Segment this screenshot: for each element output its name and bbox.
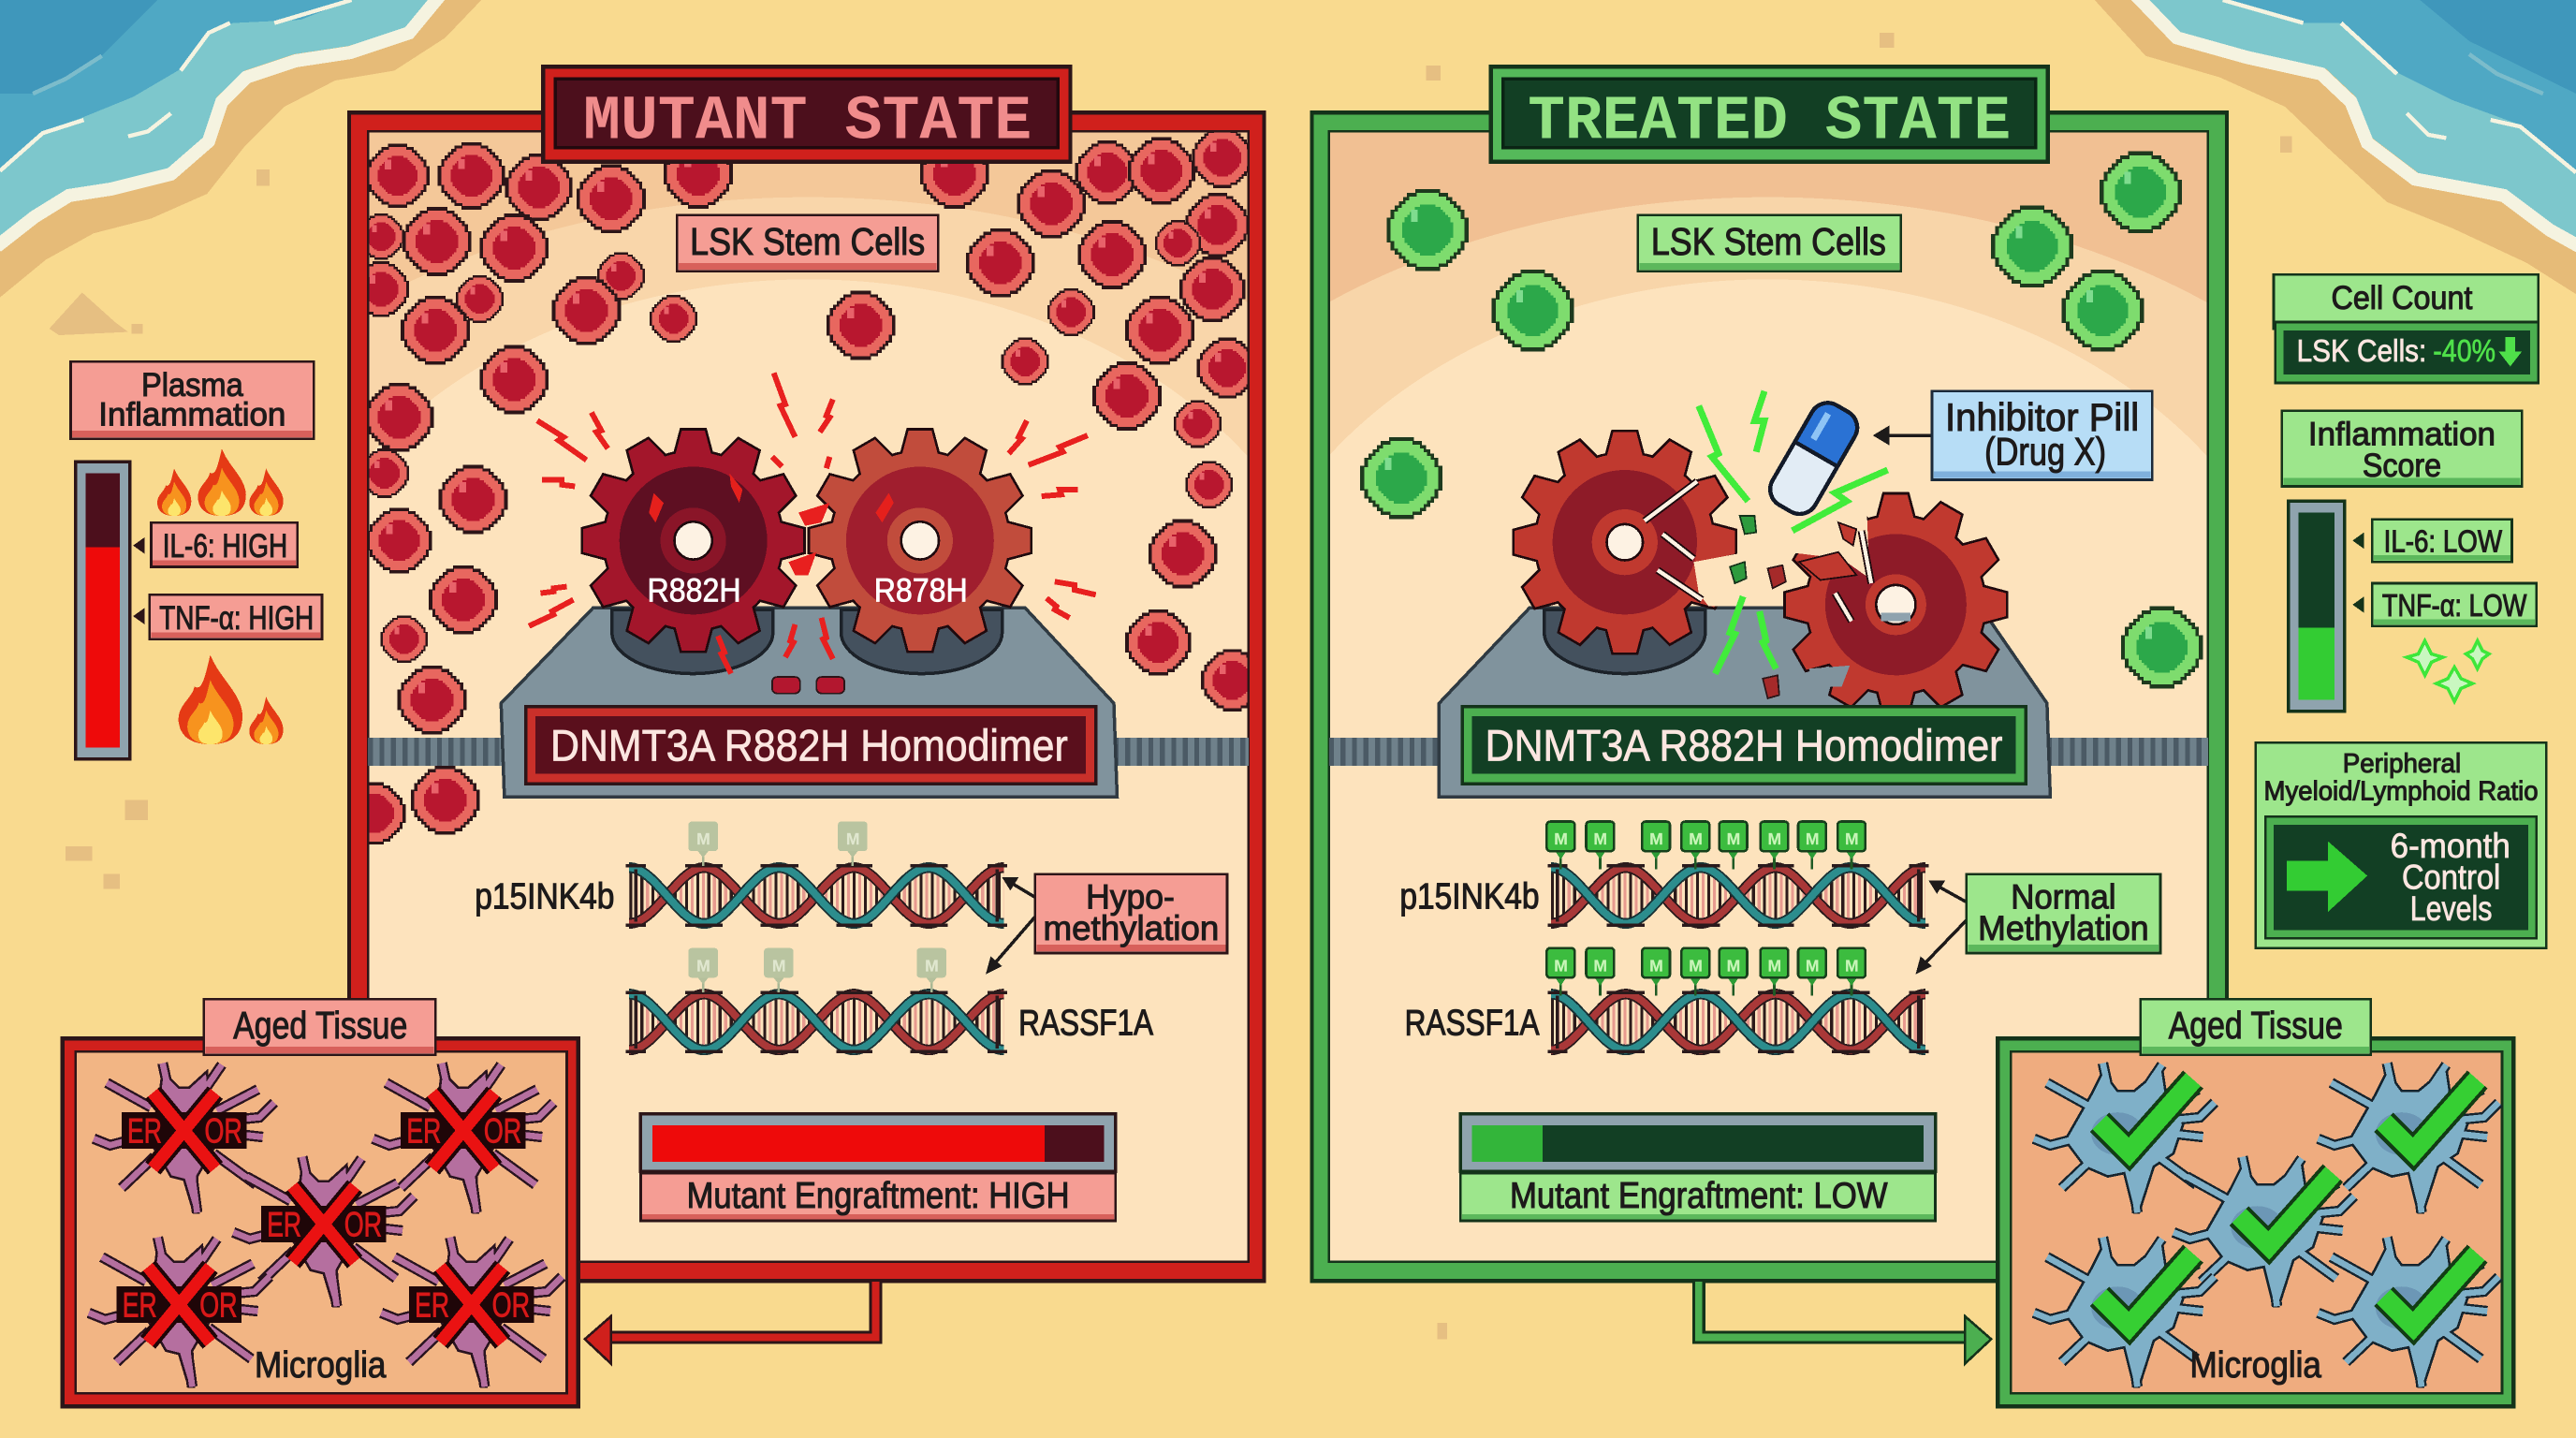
fragments and green sparks (1699, 391, 1888, 698)
dark result box: Control (2402, 858, 2500, 897)
DNA strand RASSF1A, methylated: M (1649, 956, 1663, 975)
panel: aged tissue treated (1998, 999, 2513, 1406)
DNA strand RASSF1A, hypomethylated: M (696, 956, 710, 975)
panel frame (349, 112, 1265, 1281)
icon: sparkles (2407, 640, 2489, 701)
DNA strand p15INK4b, methylated: M (1649, 829, 1663, 848)
label: DNMT3A R882H Homodimer (526, 707, 1096, 784)
panel: peripheral myeloid/lymphoid ratio: Peripheral (2343, 749, 2461, 779)
arrow to aged tissue (585, 1282, 875, 1364)
callout: inhibitor pill (1873, 391, 2152, 479)
panel: peripheral myeloid/lymphoid ratio (2256, 742, 2546, 948)
microglia healthy (2034, 1064, 2215, 1212)
panel: aged tissue mutant (63, 999, 578, 1406)
LSK cells metric (2276, 322, 2539, 383)
microglia with error: ER (406, 1112, 441, 1151)
engraftment bar: high: Mutant Engraftment: HIGH (687, 1176, 1070, 1216)
label: DNMT3A R882H Homodimer (1462, 707, 2026, 784)
DNA strand p15INK4b, methylated: M (1806, 829, 1819, 848)
callout: normal methylation: Methylation (1978, 909, 2149, 947)
shattered gear right (1786, 494, 2006, 714)
panel: plasma inflammation (left) (70, 361, 322, 759)
microglia healthy (2174, 1157, 2354, 1306)
heading: Plasma (141, 367, 243, 404)
DNA strand RASSF1A, methylated: M (1689, 956, 1703, 975)
microglia with error: ER (415, 1286, 449, 1325)
gear R878H: R878H (874, 572, 968, 609)
DNA strand p15INK4b, methylated: M (1727, 829, 1740, 848)
panel: inflammation score (2282, 411, 2537, 712)
microglia with error (373, 1064, 553, 1212)
callout: normal methylation (1915, 874, 2160, 975)
callout: normal methylation: Normal (2011, 878, 2116, 917)
dark result box: Levels (2410, 889, 2492, 928)
DNA strand p15INK4b, hypomethylated: p15INK4b (475, 877, 614, 917)
panel: mutant state (347, 65, 1266, 1367)
beach: top-right ocean (2095, 0, 2576, 294)
title banner: treated state (1491, 66, 2048, 162)
heading (2282, 411, 2522, 487)
callout: inhibitor pill: (Drug X) (1984, 430, 2106, 474)
IL-6 low: IL-6: LOW (2384, 525, 2502, 560)
label: microglia: Microglia (2190, 1345, 2321, 1386)
TNF-alpha low (2352, 583, 2537, 626)
label: LSK stem cells: LSK Stem Cells (690, 220, 925, 263)
DNA strand RASSF1A, hypomethylated: M (925, 956, 939, 975)
microglia with error: ER (127, 1112, 162, 1151)
gear socket (1544, 609, 1705, 674)
IL-6 high (133, 522, 298, 567)
arrow to aged tissue (1699, 1282, 1991, 1364)
inhibitor pill (1764, 396, 1864, 521)
TNF-alpha low: TNF-α: LOW (2382, 589, 2527, 624)
gear sockets (612, 609, 1003, 674)
microglia with error: OR (205, 1112, 242, 1151)
label: LSK stem cells (677, 215, 938, 271)
callout: hypo-methylation: methylation (1043, 909, 1219, 947)
microglia with error: ER (123, 1286, 157, 1325)
tab: aged tissue: Aged Tissue (233, 1004, 407, 1047)
inflammation gauge low (2289, 501, 2345, 712)
engraftment bar: high (640, 1114, 1116, 1221)
microglia healthy (2318, 1064, 2499, 1212)
tab: aged tissue (204, 999, 435, 1055)
tab: aged tissue (2141, 999, 2371, 1055)
engraftment bar: low: Mutant Engraftment: LOW (1510, 1176, 1888, 1216)
DNA strand p15INK4b, hypomethylated: M (846, 829, 860, 848)
DNA strand p15INK4b, methylated: M (1845, 829, 1859, 848)
title banner: mutant state: MUTANT STATE (583, 86, 1032, 157)
TNF-alpha high (133, 594, 322, 639)
DNA rail left (1329, 738, 1444, 766)
IL-6 high: IL-6: HIGH (163, 528, 287, 565)
label: DNMT3A R882H Homodimer: DNMT3A R882H Homodimer (550, 722, 1068, 771)
microglia with error (89, 1238, 270, 1387)
microglia healthy (2034, 1238, 2215, 1387)
DNA strand RASSF1A, methylated (1405, 948, 1928, 1051)
DNA strand RASSF1A, methylated: M (1806, 956, 1819, 975)
DNA strand RASSF1A, hypomethylated: M (772, 956, 786, 975)
gear R882H (583, 431, 803, 651)
DNA strand p15INK4b, methylated: M (1593, 829, 1607, 848)
engraftment bar: low (1460, 1114, 1936, 1221)
microglia with error: ER (267, 1206, 301, 1244)
TNF-alpha high: TNF-α: HIGH (159, 600, 314, 637)
DNA strand p15INK4b, methylated: M (1767, 829, 1781, 848)
LSK cells metric: -40% (2433, 334, 2496, 369)
panel interior with cells (369, 133, 1247, 1260)
heading: Inflammation (2308, 417, 2496, 453)
red sparks (529, 373, 1096, 674)
panel: cell count: Cell Count (2331, 280, 2473, 316)
LSK stem cells, mutant (many) (344, 127, 1264, 844)
LSK cells metric: LSK Cells: (2297, 334, 2426, 369)
gear R878H (810, 431, 1030, 651)
microglia with error (94, 1064, 274, 1212)
DNA strand p15INK4b, methylated: p15INK4b (1399, 877, 1540, 917)
DNA strand p15INK4b, hypomethylated: M (696, 829, 710, 848)
microglia with error: OR (344, 1206, 382, 1244)
panel inner edge (368, 131, 1249, 1262)
microglia with error: OR (492, 1286, 530, 1325)
panel: treated state (1310, 65, 2229, 1367)
gear R882H: R882H (648, 572, 741, 609)
microglia with error: OR (484, 1112, 521, 1151)
microglia with error: OR (199, 1286, 238, 1325)
DNA rail left (368, 738, 506, 766)
sand specks (50, 33, 2291, 1339)
DNA strand p15INK4b, methylated: M (1689, 829, 1703, 848)
dark result box (2265, 816, 2537, 938)
label: DNMT3A R882H Homodimer: DNMT3A R882H Homodimer (1486, 722, 2002, 771)
DNA rail right (2047, 738, 2208, 766)
heading: Score (2363, 448, 2441, 484)
DNA strand p15INK4b, hypomethylated (475, 822, 1007, 925)
DNA strand p15INK4b, methylated: M (1554, 829, 1568, 848)
DNA strand RASSF1A, methylated: M (1727, 956, 1740, 975)
panel interior with cells (1330, 133, 2207, 1260)
panel: cell count (2274, 274, 2539, 383)
DNA strand p15INK4b, methylated (1399, 822, 1928, 925)
panel inner edge (1329, 131, 2208, 1262)
arrow: control levels (2287, 842, 2367, 912)
DNA strand RASSF1A, hypomethylated (626, 948, 1153, 1051)
dark result box: 6-month (2391, 827, 2510, 865)
microglia with error (233, 1157, 414, 1306)
heading: Inflammation (98, 397, 285, 433)
panel: peripheral myeloid/lymphoid ratio: Myeloid/Lymphoid Ratio (2264, 777, 2539, 807)
DNA strand RASSF1A, methylated: M (1845, 956, 1859, 975)
label: microglia: Microglia (255, 1345, 387, 1386)
machine status lights (772, 677, 844, 694)
icon: flames bottom (179, 655, 284, 744)
broken gear left (1515, 433, 1747, 653)
heading (70, 361, 314, 439)
title banner: treated state: TREATED STATE (1528, 86, 2011, 157)
panel frame (1311, 112, 2227, 1281)
icon: flames top (157, 448, 284, 516)
callout: hypo-methylation (986, 874, 1227, 975)
microglia with error (381, 1238, 562, 1387)
microglia healthy (2318, 1238, 2499, 1387)
DNA rail right (1114, 738, 1249, 766)
beach: top-left ocean (0, 0, 481, 298)
DNA strand RASSF1A, hypomethylated: RASSF1A (1018, 1004, 1153, 1044)
DNA strand RASSF1A, methylated: M (1554, 956, 1568, 975)
machine base (1439, 608, 2050, 797)
DNA strand RASSF1A, methylated: RASSF1A (1405, 1004, 1540, 1044)
callout: hypo-methylation: Hypo- (1086, 878, 1175, 917)
inflammation gauge high (76, 462, 130, 759)
LSK stem cells, treated (few) (1360, 151, 2203, 688)
IL-6 low (2352, 520, 2512, 562)
DNA strand RASSF1A, methylated: M (1593, 956, 1607, 975)
callout: inhibitor pill: Inhibitor Pill (1945, 395, 2139, 439)
title banner: mutant state (543, 66, 1070, 162)
machine base (501, 608, 1117, 797)
label: LSK stem cells: LSK Stem Cells (1651, 220, 1886, 263)
DNA strand RASSF1A, methylated: M (1767, 956, 1781, 975)
tab: aged tissue: Aged Tissue (2169, 1004, 2343, 1047)
